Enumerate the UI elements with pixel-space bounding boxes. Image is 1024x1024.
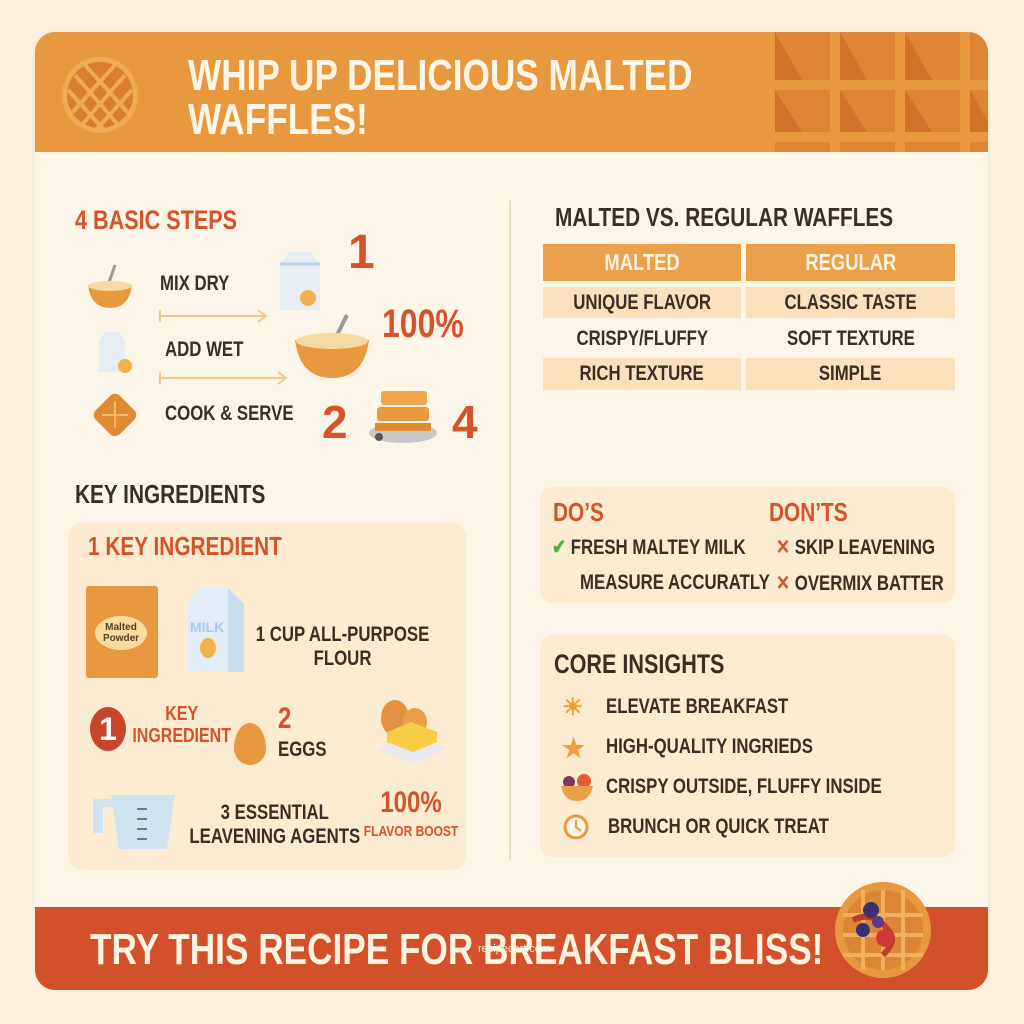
comparison table: CRISPY/FLUFFY — [576, 327, 708, 350]
icon: footer waffle with berries — [835, 882, 931, 978]
divider — [509, 200, 511, 860]
comparison table: MALTED — [604, 249, 680, 275]
panel: core insights: CRISPY OUTSIDE, FLUFFY INSIDE — [606, 775, 882, 798]
icon: clock — [564, 814, 588, 840]
stat: flavor boost — [364, 786, 458, 840]
panel: core insights — [540, 635, 955, 857]
icon: egg — [234, 723, 266, 765]
steps diagram — [88, 226, 478, 448]
text: leavening: LEAVENING AGENTS — [189, 825, 360, 848]
text: flour: FLOUR — [314, 647, 372, 670]
icon: milk small — [99, 332, 132, 373]
panel: do's and don'ts — [540, 487, 955, 603]
text: flour: 1 CUP ALL-PURPOSE — [256, 623, 430, 646]
icon: sun: ☀ — [562, 694, 584, 721]
header pattern — [775, 32, 988, 152]
footer banner: recipecart.com — [478, 943, 550, 955]
heading: comparison: MALTED VS. REGULAR WAFFLES — [555, 202, 893, 232]
panel: core insights: HIGH-QUALITY INGRIEDS — [606, 735, 813, 758]
steps diagram: 100% — [382, 302, 464, 346]
arrow 1 — [159, 309, 268, 323]
text: eggs: EGGS — [278, 738, 327, 761]
comparison table — [543, 244, 955, 390]
heading: key ingredients: KEY INGREDIENTS — [75, 479, 265, 509]
icon: milk carton — [280, 252, 320, 310]
icon: fruit bowl — [561, 774, 593, 801]
arrow 2 — [159, 371, 288, 385]
panel heading: 1 KEY INGREDIENT — [88, 531, 282, 561]
icon: star: ★ — [562, 733, 585, 763]
text: flour — [256, 623, 430, 670]
panel: do's and don'ts: MEASURE ACCURATLY — [580, 571, 770, 594]
panel: core insights: CORE INSIGHTS — [554, 649, 724, 679]
footer banner: TRY THIS RECIPE FOR BREAKFAST BLISS! — [90, 925, 823, 974]
steps diagram: MIX DRY — [160, 272, 229, 295]
title: WAFFLES! — [188, 95, 368, 144]
footer banner — [35, 907, 988, 990]
key ingredient badge: INGREDIENT — [132, 725, 231, 747]
comparison table: RICH TEXTURE — [580, 362, 704, 385]
stat: flavor boost: FLAVOR BOOST — [364, 823, 458, 840]
key ingredient badge — [90, 703, 231, 751]
icon: waffle maker — [369, 391, 437, 443]
heading: 4 basic steps: 4 BASIC STEPS — [75, 205, 237, 235]
panel: do's and don'ts: DO’S — [553, 497, 604, 527]
icon: big bowl — [295, 314, 369, 378]
key ingredient badge: KEY — [165, 703, 198, 725]
panel: do's and don'ts: ✔ FRESH MALTEY MILK — [552, 536, 746, 559]
icon: measuring cup — [93, 795, 175, 849]
text: leavening: 3 ESSENTIAL — [221, 801, 329, 824]
text: eggs: 2 — [278, 702, 291, 735]
header banner — [35, 32, 988, 152]
comparison table: SIMPLE — [819, 362, 882, 385]
steps diagram: 4 — [452, 396, 478, 448]
panel: do's and don'ts: ✕ SKIP LEAVENING — [776, 536, 935, 559]
key ingredient badge: 1 — [99, 711, 117, 747]
icon: milk carton — [188, 588, 244, 672]
icon: bowl small — [88, 264, 132, 308]
title: WHIP UP DELICIOUS MALTED — [188, 51, 693, 100]
icon: malted powder bag: Malted Powder — [103, 622, 139, 644]
text: leavening — [189, 801, 360, 848]
stat: flavor boost: 100% — [380, 786, 442, 819]
panel: ingredients — [68, 523, 466, 870]
comparison table: REGULAR — [805, 249, 896, 275]
icon: milk carton: MILK — [190, 619, 224, 635]
comparison table: SOFT TEXTURE — [787, 327, 914, 350]
steps diagram: 2 — [322, 396, 348, 448]
panel: core insights: ELEVATE BREAKFAST — [606, 695, 788, 718]
icon: malted powder bag — [86, 586, 158, 678]
comparison table: CLASSIC TASTE — [784, 291, 917, 314]
steps diagram: 1 — [348, 226, 375, 279]
steps diagram: COOK & SERVE — [165, 402, 294, 425]
steps diagram: ADD WET — [165, 338, 243, 361]
icon: waffle small — [94, 394, 136, 436]
icon: header waffle — [62, 57, 138, 133]
text: eggs — [278, 702, 327, 761]
panel: do's and don'ts: ✕ OVERMIX BATTER — [776, 572, 944, 595]
panel: core insights: BRUNCH OR QUICK TREAT — [608, 815, 829, 838]
comparison table: UNIQUE FLAVOR — [573, 291, 711, 314]
panel: do's and don'ts: DON’TS — [769, 497, 848, 527]
icon: eggs and butter — [376, 700, 446, 764]
title — [188, 51, 693, 144]
